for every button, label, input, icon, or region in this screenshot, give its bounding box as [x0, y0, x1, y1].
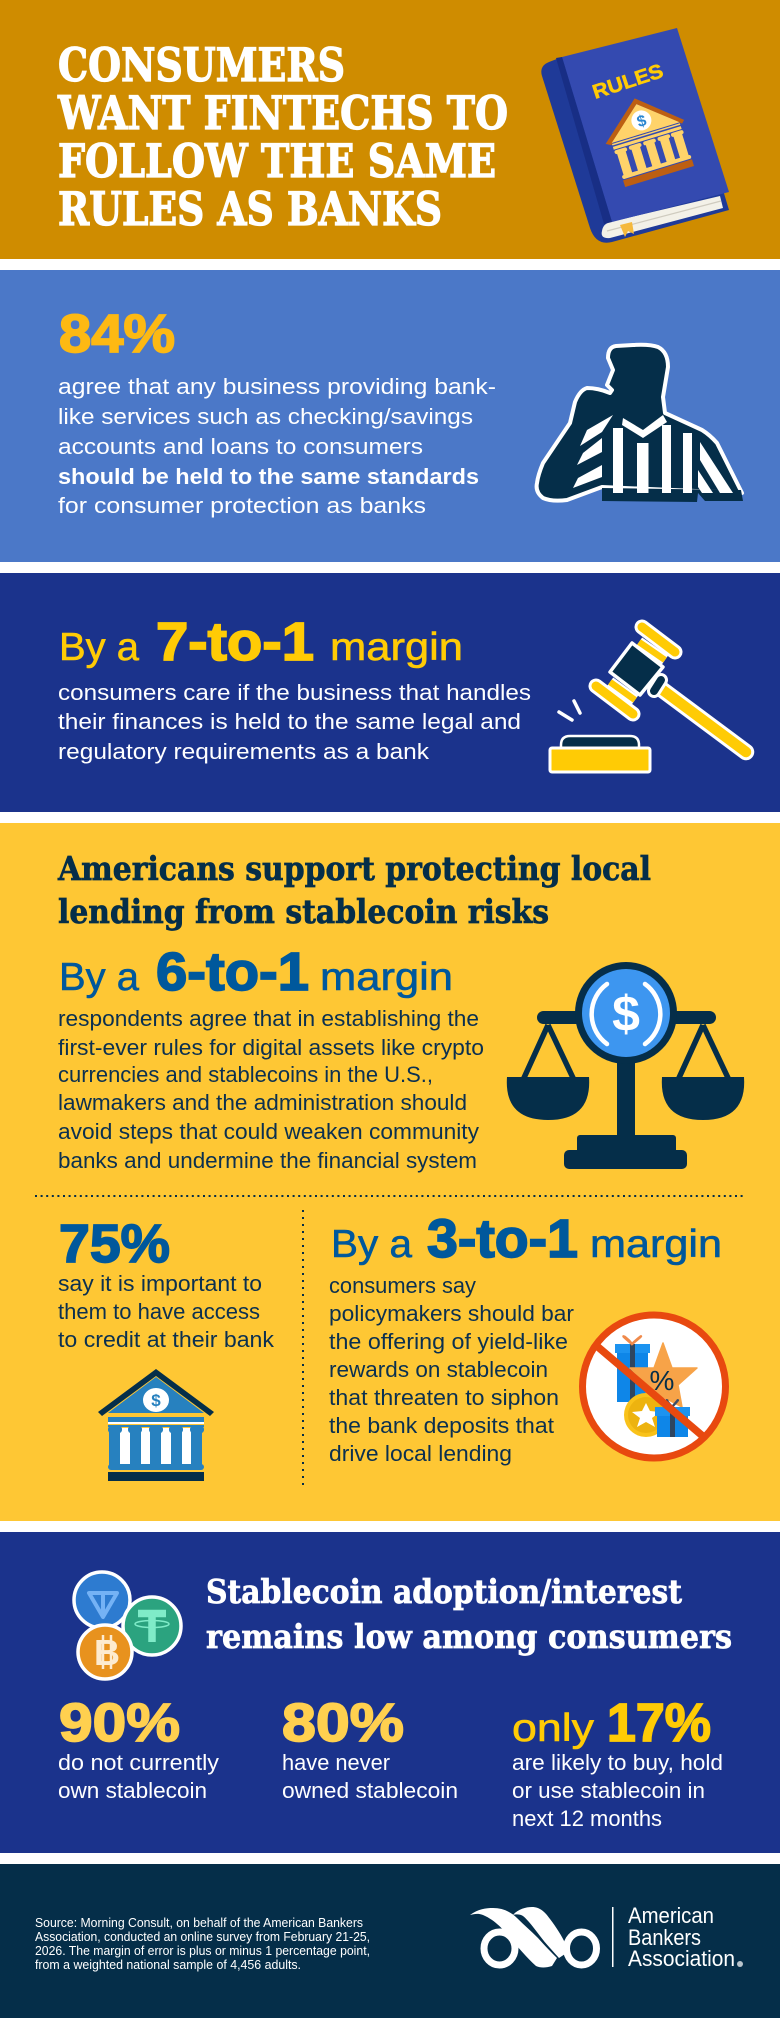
- icon: scales: [507, 962, 744, 1169]
- caption: 17%: next 12 months: [512, 1806, 662, 1831]
- text block: banks and undermine the financial system: [58, 1148, 477, 1173]
- logo: American Bankers Association: American: [628, 1903, 714, 1928]
- text block: 3-to-1: the bank deposits that: [329, 1413, 555, 1438]
- text block: 3-to-1: rewards on stablecoin: [329, 1357, 548, 1382]
- source note: Association, conducted an online survey from February 21-25,: [35, 1930, 370, 1944]
- panel: header: [0, 0, 780, 259]
- source note: Source: Morning Consult, on behalf of the American Bankers: [35, 1916, 363, 1930]
- text block: like services such as checking/savings: [58, 404, 473, 429]
- caption: 17%: [512, 1750, 723, 1831]
- text block: lawmakers and the administration should: [58, 1090, 467, 1115]
- heading: Stablecoin adoption/interest: [206, 1572, 683, 1611]
- icon: crypto coins: [74, 1572, 181, 1679]
- heading: remains low among consumers: [206, 1617, 732, 1656]
- caption: 80%: have never: [282, 1750, 390, 1775]
- text block: 3-to-1: that threaten to siphon: [329, 1385, 559, 1410]
- panel: 7-to-1 margin: [0, 573, 780, 812]
- icon: bank on book: [595, 86, 698, 189]
- text block: their finances is held to the same legal and: [58, 709, 521, 734]
- heading: [57, 849, 651, 931]
- text block: currencies and stablecoins in the U.S.,: [58, 1062, 433, 1087]
- statistic: 7-to-1 margin: [59, 612, 463, 672]
- text block: 3-to-1: drive local lending: [329, 1441, 512, 1466]
- caption: 90%: [58, 1750, 220, 1803]
- statistic: 90%: 90%: [59, 1693, 180, 1753]
- text block: 75%: [58, 1271, 275, 1352]
- statistic: 7-to-1 margin: 7-to-1: [156, 612, 314, 672]
- text block: 3-to-1: consumers say: [329, 1273, 477, 1298]
- statistic: 7-to-1 margin: By a: [59, 626, 139, 669]
- heading: [206, 1572, 732, 1656]
- text block: agree that any business providing bank-: [58, 374, 496, 399]
- text block: avoid steps that could weaken community: [58, 1119, 480, 1144]
- statistic: 3-to-1 margin: 3-to-1: [427, 1209, 578, 1269]
- icon: scales: $: [612, 986, 640, 1042]
- icon: bank on book: $: [635, 112, 649, 131]
- logo: American Bankers Association: [470, 1903, 743, 1971]
- panel: local lending: [0, 823, 780, 1521]
- caption: 80%: owned stablecoin: [282, 1778, 458, 1803]
- icon: rule book: [541, 28, 729, 243]
- statistic: 6-to-1 margin: margin: [320, 956, 453, 999]
- statistic: 3-to-1 margin: [331, 1209, 722, 1269]
- statistic: 80%: [282, 1693, 458, 1803]
- caption: 17%: or use stablecoin in: [512, 1778, 705, 1803]
- text block: for consumer protection as banks: [58, 493, 426, 518]
- book label: RULES: [590, 60, 666, 104]
- caption: 90%: do not currently: [58, 1750, 220, 1775]
- icon: referee: [537, 345, 743, 502]
- statistic: 7-to-1 margin: margin: [330, 626, 463, 669]
- panel: stablecoin adoption: [0, 1532, 780, 1853]
- caption: 80%: [282, 1750, 458, 1803]
- statistic: 75%: 75%: [59, 1214, 170, 1274]
- title: RULES AS BANKS: [58, 182, 442, 236]
- text block: 75%: to credit at their bank: [58, 1327, 275, 1352]
- caption: 17%: are likely to buy, hold: [512, 1750, 723, 1775]
- divider: vertical dotted: [302, 1210, 304, 1490]
- text block: first-ever rules for digital assets like crypto: [58, 1035, 484, 1060]
- text block: 3-to-1: [329, 1273, 574, 1466]
- heading: lending from stablecoin risks: [58, 892, 549, 931]
- statistic: only 17%: only: [512, 1707, 595, 1750]
- source note: from a weighted national sample of 4,456 adults.: [35, 1958, 301, 1972]
- icon: no rewards: [582, 1315, 726, 1458]
- text block: [58, 1006, 484, 1173]
- statistic: 90%: [58, 1693, 220, 1803]
- statistic: 3-to-1 margin: By a: [331, 1223, 412, 1266]
- statistic: 84%: 84%: [59, 304, 175, 364]
- text block: 3-to-1: the offering of yield-like: [329, 1329, 568, 1354]
- text block: 75%: say it is important to: [58, 1271, 262, 1296]
- text block: [58, 374, 496, 518]
- statistic: 80%: 80%: [282, 1693, 404, 1753]
- text block: [58, 680, 531, 764]
- text block: 3-to-1: policymakers should bar: [329, 1301, 574, 1326]
- logo: American Bankers Association: Bankers: [628, 1925, 701, 1950]
- heading: Americans support protecting local: [57, 849, 651, 888]
- statistic: 6-to-1 margin: [59, 942, 453, 1002]
- statistic: only 17%: 17%: [607, 1693, 711, 1753]
- statistic: only 17%: [512, 1693, 723, 1831]
- panel: footer: [0, 1864, 780, 2018]
- text block: consumers care if the business that handles: [58, 680, 531, 705]
- icon: no rewards: %: [650, 1365, 674, 1396]
- panel: 84 percent: [0, 270, 780, 562]
- statistic: 6-to-1 margin: 6-to-1: [156, 942, 309, 1002]
- title: [57, 38, 508, 236]
- icon: bank: [98, 1369, 214, 1481]
- statistic: 3-to-1 margin: margin: [590, 1223, 722, 1266]
- title: FOLLOW THE SAME: [58, 134, 496, 188]
- logo: American Bankers Association: Association: [628, 1946, 735, 1971]
- statistic: 6-to-1 margin: By a: [59, 956, 139, 999]
- title: CONSUMERS: [58, 38, 345, 92]
- coin: bitcoin: B: [94, 1632, 120, 1673]
- caption: 90%: own stablecoin: [58, 1778, 207, 1803]
- icon: gavel: [550, 627, 746, 772]
- source note: 2026. The margin of error is plus or minus 1 percentage point,: [35, 1944, 370, 1958]
- text block: 75%: them to have access: [58, 1299, 260, 1324]
- coin: tether: [123, 1597, 181, 1655]
- coin: toncoin: [74, 1572, 130, 1628]
- text block: respondents agree that in establishing the: [58, 1006, 479, 1031]
- title: WANT FINTECHS TO: [57, 86, 508, 140]
- text block: accounts and loans to consumers: [58, 434, 423, 459]
- text block: should be held to the same standards: [58, 464, 479, 489]
- divider: horizontal dotted: [35, 1195, 745, 1197]
- text block: regulatory requirements as a bank: [58, 739, 430, 764]
- source note: [35, 1916, 370, 1972]
- icon: bank: $: [151, 1391, 161, 1410]
